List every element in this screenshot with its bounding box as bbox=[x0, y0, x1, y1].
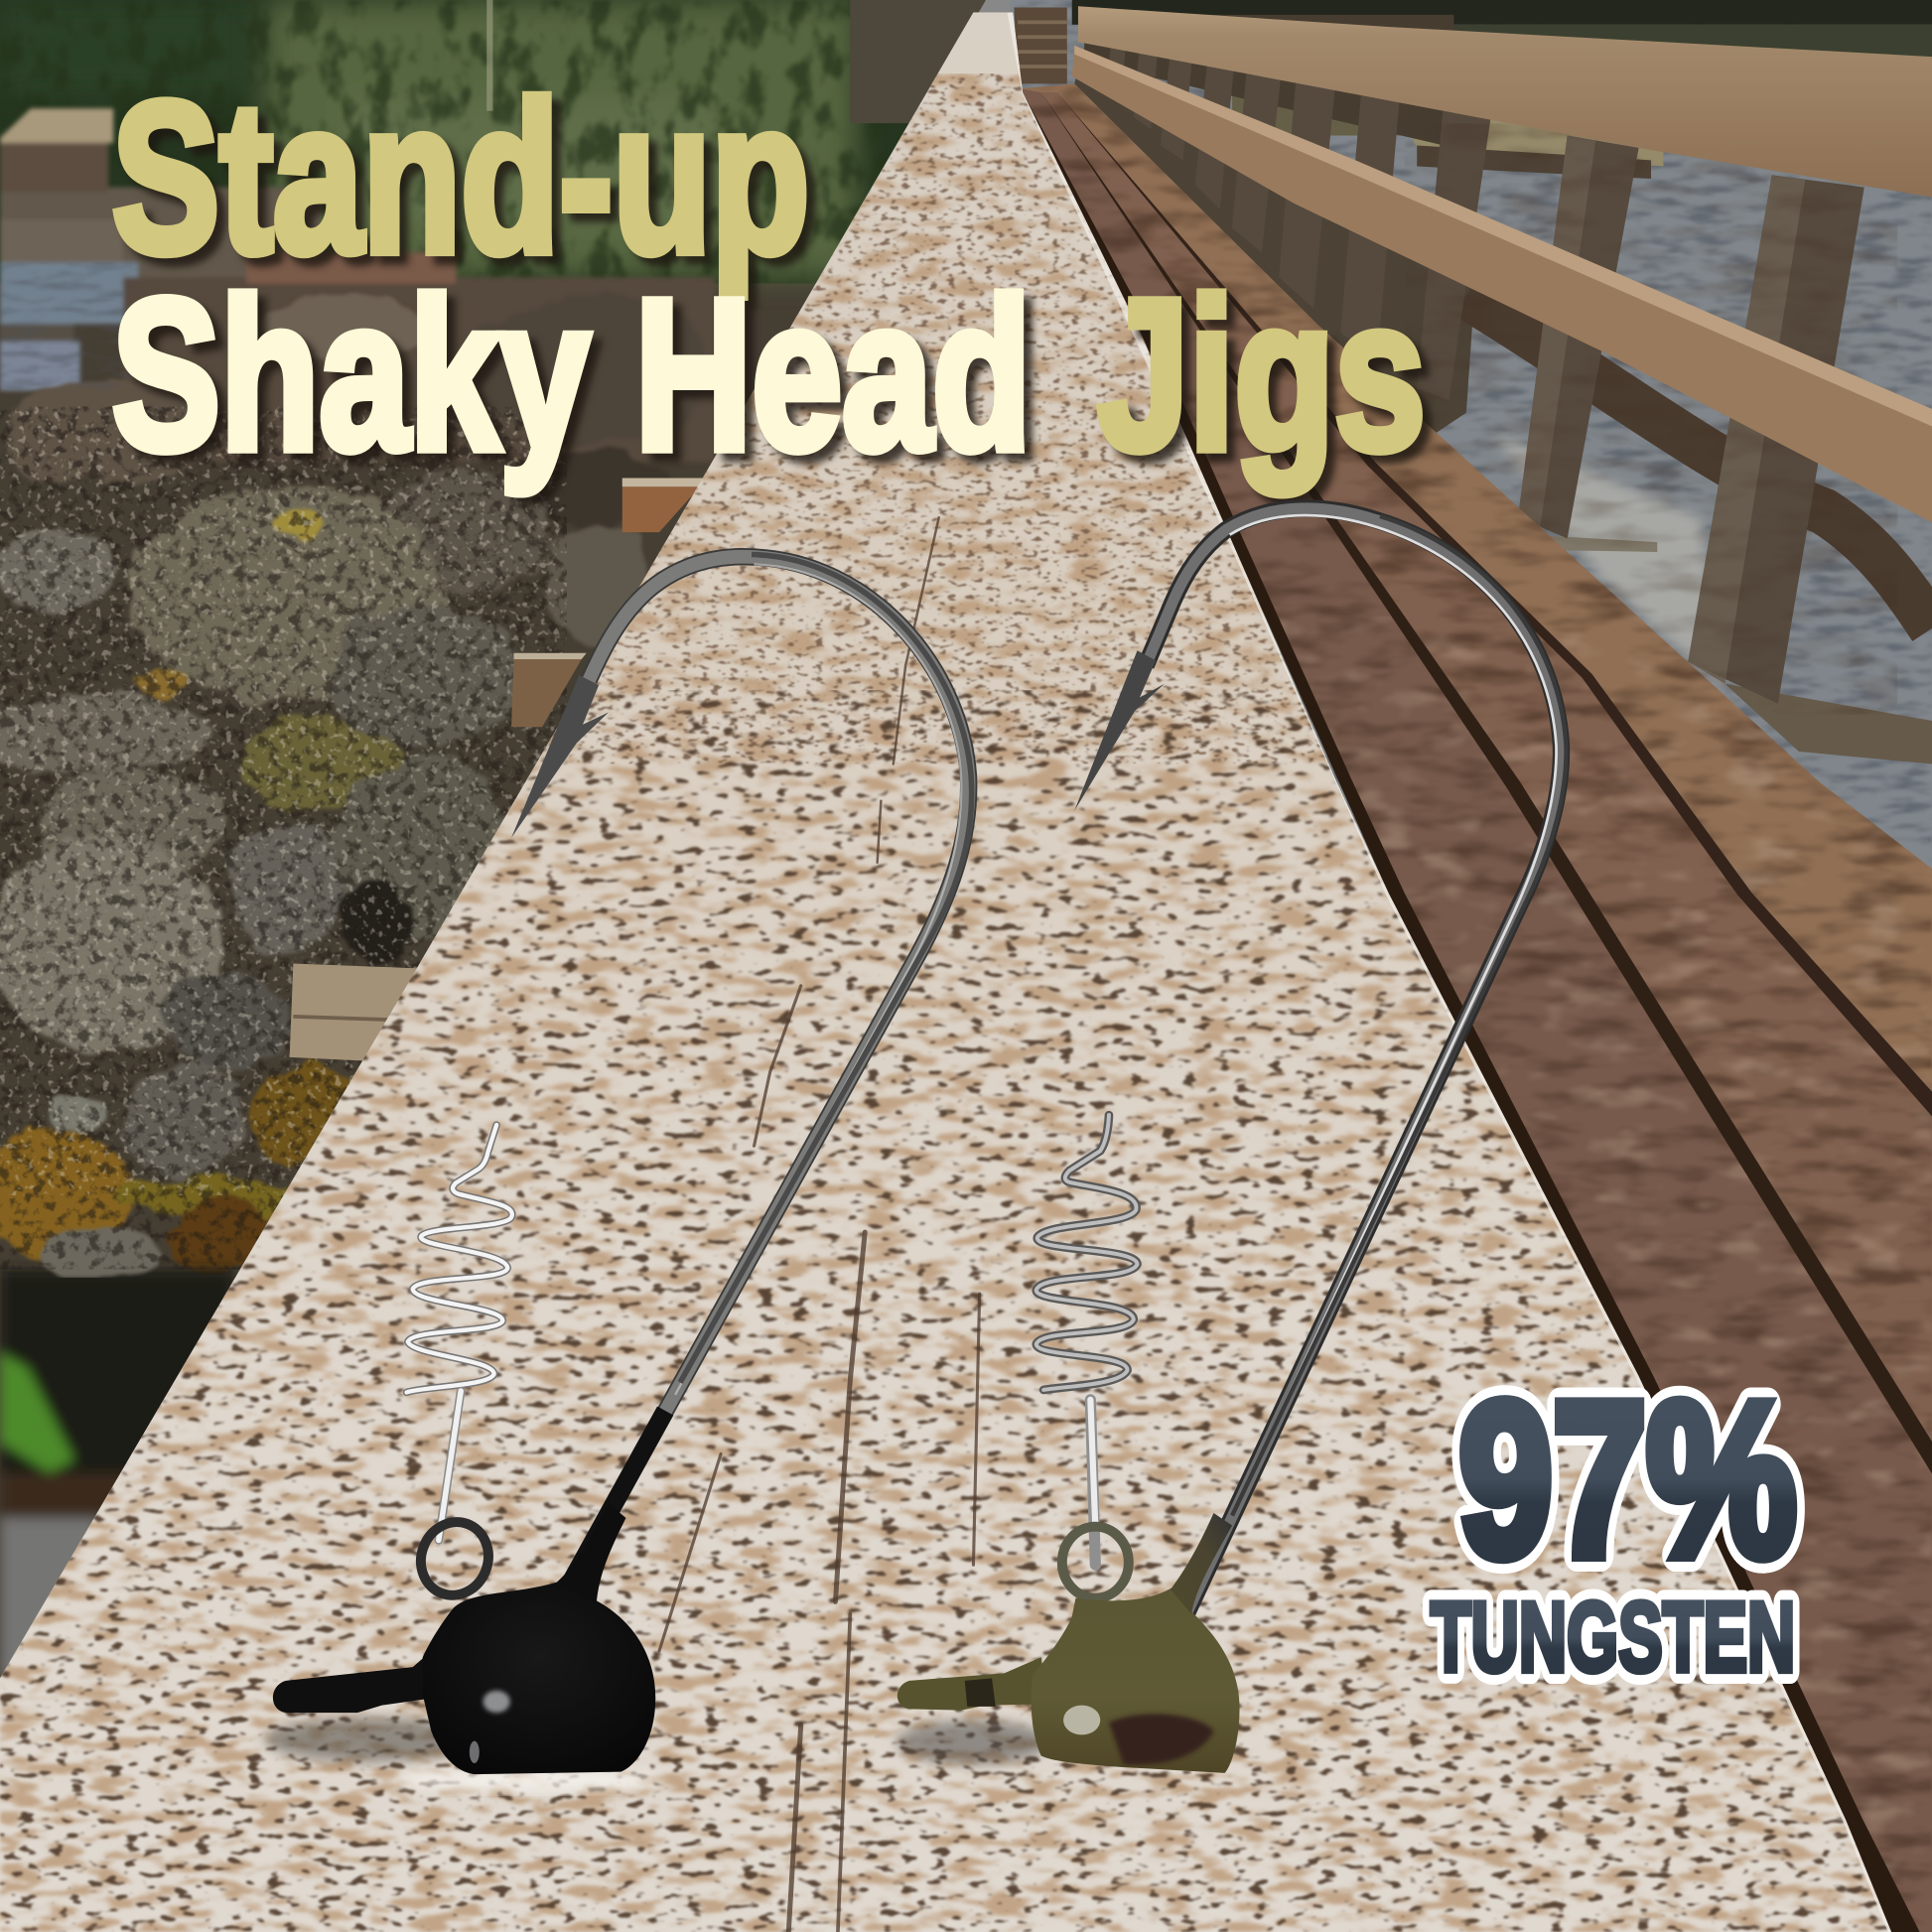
eyelet ring bbox=[411, 1513, 498, 1604]
head neck bbox=[1171, 1513, 1232, 1614]
plank gaps bbox=[1041, 92, 1932, 1473]
head highlights bbox=[483, 1691, 510, 1713]
light foam water bbox=[1491, 431, 1725, 690]
cracks bbox=[659, 517, 980, 1932]
title word: Jigs: Jigs bbox=[1098, 255, 1426, 494]
hook point and barb bbox=[511, 675, 609, 838]
lead head dome bbox=[423, 1580, 655, 1774]
hook bbox=[567, 554, 972, 1589]
second rail bbox=[1072, 46, 1932, 522]
title: Stand-up Shaky Head Jigs bbox=[112, 58, 1426, 494]
steps at the far end bbox=[1014, 7, 1067, 83]
weed guard bbox=[897, 1657, 1047, 1711]
hook bbox=[1146, 508, 1566, 1616]
title line 1: Stand-up bbox=[112, 58, 809, 297]
grey rock above pool bbox=[40, 1228, 163, 1276]
weed guard bbox=[273, 1651, 434, 1713]
eyelet ring bbox=[1062, 1527, 1129, 1598]
trees bbox=[0, 0, 986, 283]
railing posts bbox=[1106, 35, 1864, 704]
background: left bank with trees and rocks bbox=[0, 0, 986, 1725]
wooden beam ends bbox=[290, 964, 421, 1062]
screw-lock spring bbox=[407, 1125, 512, 1540]
head highlights bbox=[1109, 1714, 1213, 1765]
title line 2: Shaky Head bbox=[112, 255, 1032, 494]
top rail bbox=[1078, 6, 1932, 198]
background: right deck planks bbox=[1011, 73, 1932, 1932]
jig: olive shaky head bbox=[897, 508, 1566, 1773]
hook point and barb bbox=[1074, 650, 1165, 811]
far bank strip bbox=[1725, 684, 1932, 763]
head neck bbox=[557, 1503, 625, 1604]
far bank, platform and water bbox=[0, 108, 715, 471]
rock field bbox=[0, 295, 715, 1276]
badge: 97% tungsten bbox=[1431, 1356, 1796, 1693]
97% figure: 97% bbox=[1458, 1356, 1796, 1601]
dark pool and moss bbox=[0, 1269, 234, 1678]
shadows under jig heads bbox=[265, 1718, 1049, 1792]
jig: black shaky head bbox=[273, 554, 972, 1774]
dark post thicket below the second rail bbox=[1074, 56, 1478, 462]
97% white outline: 97% bbox=[1458, 1356, 1796, 1601]
lead head dome bbox=[1032, 1587, 1240, 1773]
lower curved beam bbox=[1466, 296, 1932, 628]
background: right side water and railing bbox=[1011, 0, 1932, 936]
screw-lock spring bbox=[1036, 1115, 1138, 1565]
